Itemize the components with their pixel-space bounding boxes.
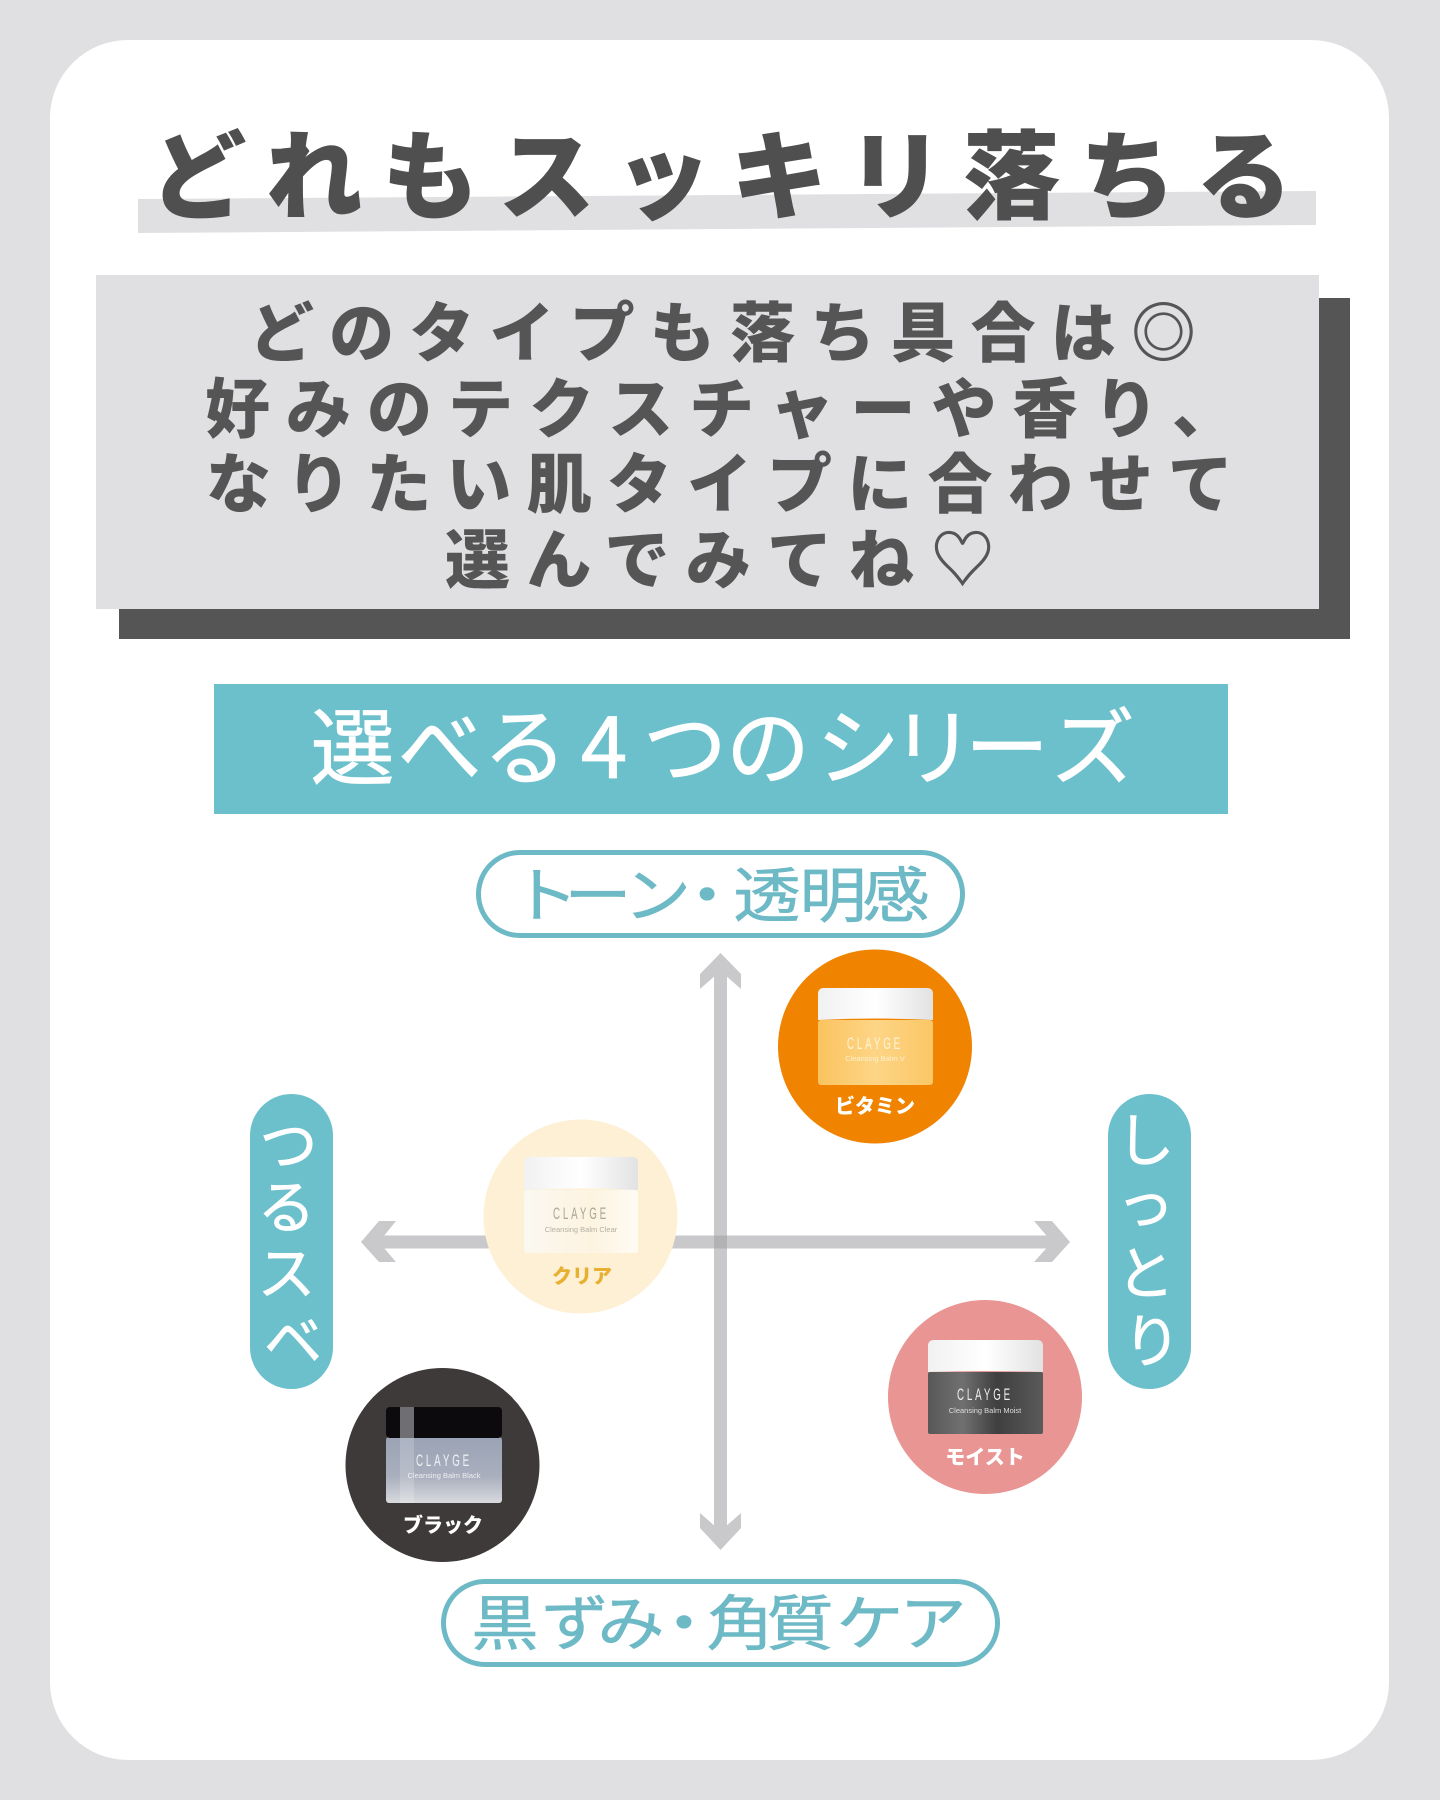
label: right axis moist: り — [1123, 1295, 1181, 1379]
label: left axis smooth: ス — [257, 1227, 316, 1311]
product: clear — [484, 1120, 678, 1314]
arrow: vertical axis — [700, 953, 741, 1550]
product: moist — [888, 1300, 1082, 1494]
label: right axis moist — [1108, 1094, 1191, 1389]
label: vitamin name: ビタミン — [835, 1090, 915, 1119]
text block: message: なりたい肌タイプに合わせて — [206, 432, 1233, 526]
label: left axis smooth: つ — [259, 1099, 318, 1183]
product: vitamin: CLAYGE — [847, 1034, 903, 1053]
product: moist: Cleansing Balm Moist — [949, 1406, 1022, 1415]
arrow: horizontal axis — [361, 1221, 1070, 1262]
panel: message box with drop shadow — [96, 275, 1350, 639]
product: clear: CLAYGE — [553, 1204, 609, 1223]
label: left axis smooth: る — [257, 1161, 316, 1245]
heading: title with highlight band: どれもスッキリ落ちる — [150, 100, 1292, 239]
product: black: Cleansing Balm Black — [408, 1471, 481, 1480]
product: black — [346, 1368, 540, 1562]
label: black name: ブラック — [403, 1509, 483, 1538]
text block: message — [205, 281, 1237, 602]
product: black: CLAYGE — [416, 1451, 472, 1470]
label: left axis smooth: ベ — [264, 1295, 322, 1379]
text block: message: 選んでみてね♡ — [445, 508, 995, 602]
product: vitamin: Cleansing Balm V — [845, 1054, 905, 1063]
product: moist: CLAYGE — [957, 1385, 1013, 1404]
label: top axis tone and clarity: トーン・透明感 — [511, 848, 930, 935]
label: clear name: クリア — [552, 1260, 612, 1289]
product: clear: Cleansing Balm Clear — [545, 1225, 618, 1234]
label: bottom axis pore and keratin care: 黒ずみ・角質ケア — [471, 1576, 967, 1663]
product: vitamin — [778, 950, 972, 1144]
label: right axis moist: っ — [1116, 1157, 1175, 1241]
label: right axis moist: し — [1116, 1094, 1175, 1178]
label: left axis smooth — [250, 1094, 333, 1389]
text block: message: どのタイプも落ち具合は◎ — [249, 281, 1196, 375]
label: moist name: モイスト — [945, 1441, 1025, 1470]
text block: message: 好みのテクスチャーや香り、 — [205, 357, 1237, 451]
label: right axis moist: と — [1116, 1227, 1175, 1311]
banner: four series heading: 選べる4つのシリーズ — [310, 682, 1135, 803]
